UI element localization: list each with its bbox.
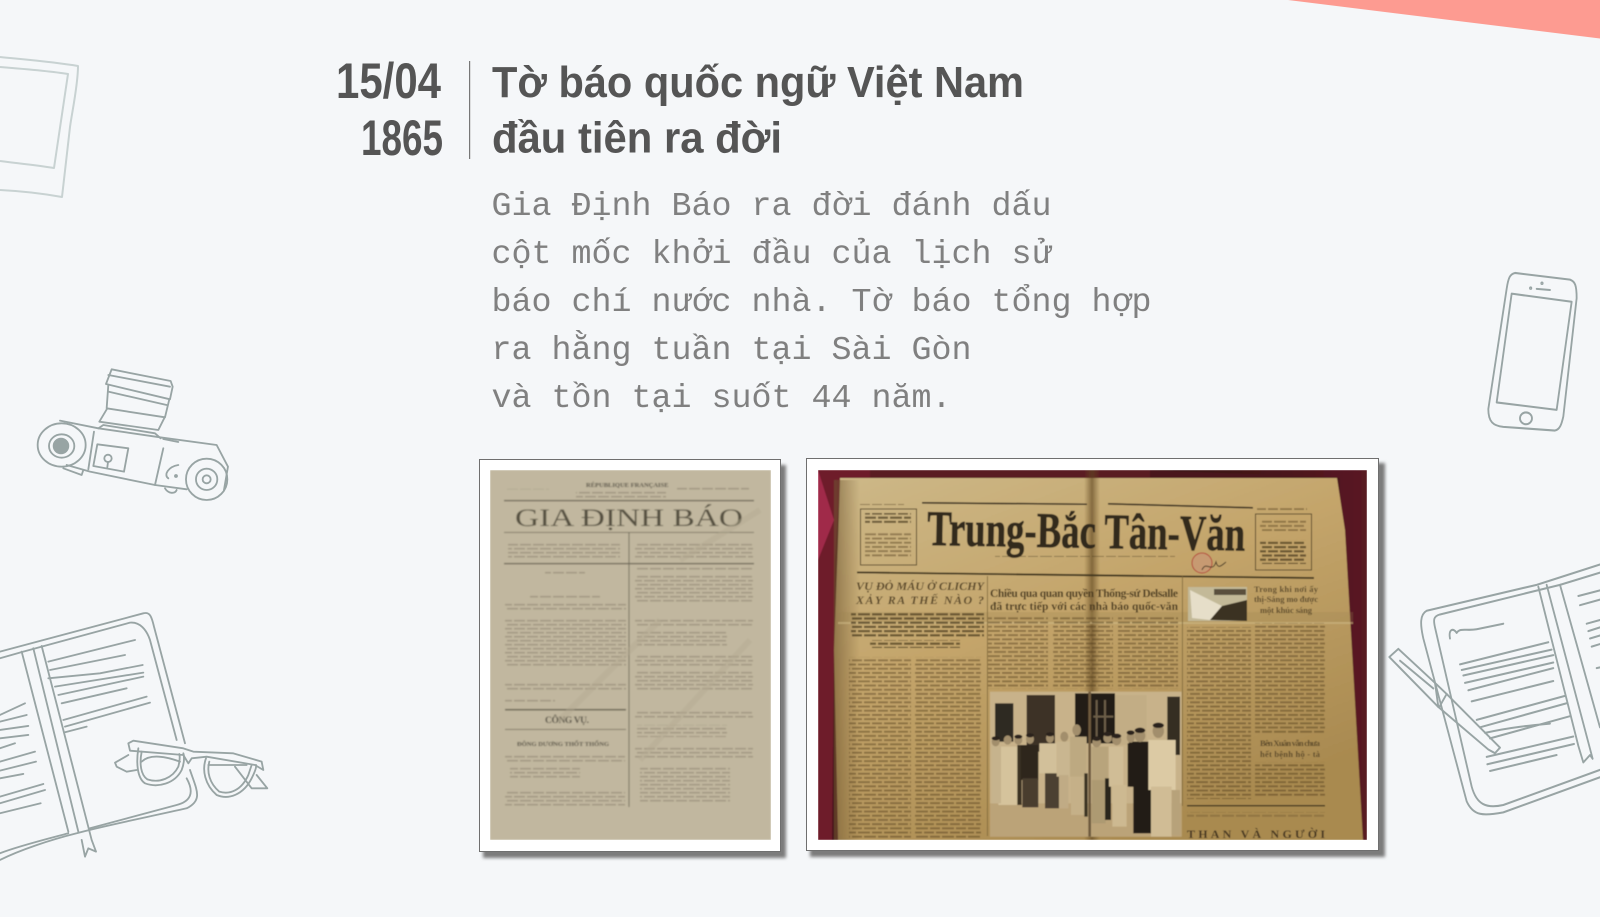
photo: Trung Bac Tan Van newspaper: Trung-Bắc Tân-Văn bbox=[927, 500, 1246, 562]
photo: Gia Dinh Bao newspaper: ĐÔNG DƯƠNG THỐT THỐNG bbox=[517, 740, 609, 748]
corner accent shape bbox=[1288, 0, 1600, 38]
icon: photo frame bbox=[0, 57, 78, 197]
photo: Trung Bac Tan Van newspaper: Chiều qua quan quyền Thống-sứ Delsalle bbox=[990, 587, 1178, 600]
photo: Gia Dinh Bao newspaper bbox=[480, 460, 786, 858]
photo: Gia Dinh Bao newspaper: RÉPUBLIQUE FRANÇAISE bbox=[586, 481, 669, 489]
body text: ra hằng tuần tại Sài Gòn bbox=[492, 330, 972, 370]
icon: open notebook bbox=[0, 613, 197, 860]
body text bbox=[492, 188, 1152, 418]
photo: Trung Bac Tan Van newspaper: VỤ ĐỎ MÁU Ở CLICHY bbox=[856, 579, 986, 593]
date bbox=[336, 53, 443, 166]
body text: báo chí nước nhà. Tờ báo tổng hợp bbox=[492, 283, 1152, 322]
date: 15/04 bbox=[336, 53, 441, 109]
icon: glasses bbox=[115, 741, 267, 797]
heading: đầu tiên ra đời bbox=[492, 114, 782, 162]
photo: Gia Dinh Bao newspaper: CÔNG VỤ. bbox=[545, 713, 589, 726]
icon: camera bbox=[38, 369, 228, 500]
photo: Trung Bac Tan Van newspaper: một khúc sáng bbox=[1260, 605, 1313, 615]
body text: Gia Định Báo ra đời đánh dấu bbox=[492, 188, 1052, 226]
date divider bbox=[469, 61, 470, 159]
date: 1865 bbox=[361, 110, 443, 166]
photo: Trung Bac Tan Van newspaper: hết bệnh hộ - tà bbox=[1260, 749, 1321, 759]
photo: Trung Bac Tan Van newspaper: THAN VÀ NGƯỜI bbox=[1187, 827, 1325, 841]
photo: Trung Bac Tan Van newspaper: XẢY RA THẾ NÀO ? bbox=[855, 592, 984, 607]
photo: Gia Dinh Bao newspaper: GIA ĐỊNH BÁO bbox=[515, 504, 743, 532]
icon: smartphone bbox=[1488, 273, 1577, 431]
photo: Trung Bac Tan Van newspaper bbox=[806, 458, 1385, 857]
photo: Trung Bac Tan Van newspaper: Trong khi nơi ấy bbox=[1254, 584, 1319, 594]
icon: notebook with pen bbox=[1389, 564, 1600, 814]
body text: và tồn tại suốt 44 năm. bbox=[492, 380, 952, 418]
heading bbox=[492, 58, 1024, 162]
photo: Trung Bac Tan Van newspaper: đã trực tiếp với các nhà báo quốc-văn bbox=[990, 600, 1179, 613]
photo: Trung Bac Tan Van newspaper: thị-Sáng mo được bbox=[1254, 594, 1318, 604]
photo: Trung Bac Tan Van newspaper: Bên Xuân vẫn chưa bbox=[1260, 738, 1321, 748]
heading: Tờ báo quốc ngữ Việt Nam bbox=[492, 58, 1024, 107]
body text: cột mốc khởi đầu của lịch sử bbox=[492, 236, 1053, 274]
